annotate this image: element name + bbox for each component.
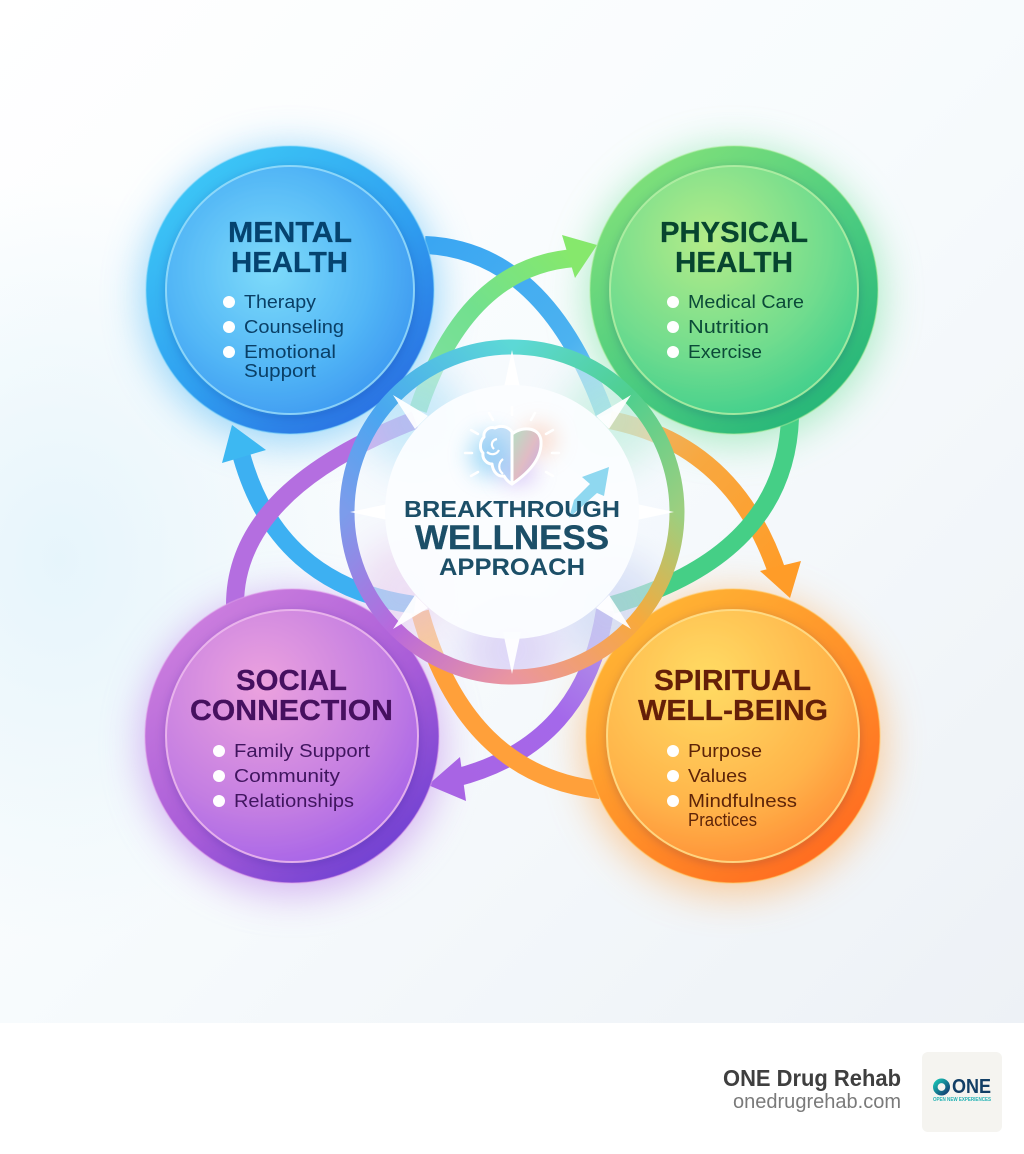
list: spiritual well-being items: Purpose (688, 741, 762, 761)
starburst (350, 350, 674, 674)
list: spiritual well-being items: Mindfulness (688, 791, 797, 811)
heading: spiritual well-being: SPIRITUAL (654, 665, 811, 697)
inner white disc (385, 385, 639, 639)
panel: social connection (145, 589, 439, 883)
heading: physical health: PHYSICAL (660, 217, 808, 249)
heading: physical health: HEALTH (675, 247, 793, 279)
heading: social connection (190, 665, 393, 727)
heading: spiritual well-being: WELL-BEING (638, 695, 828, 727)
list: mental health items: Counseling (244, 317, 344, 337)
list: social connection items: Community (234, 766, 340, 786)
panel: mental health (146, 146, 434, 434)
list: physical health items (667, 292, 804, 362)
heading: breakthrough wellness approach: BREAKTHROUGH (404, 496, 620, 522)
list: social connection items: Family Support (234, 741, 370, 761)
list: physical health items: Nutrition (688, 317, 769, 337)
panel: spiritual well-being (586, 589, 880, 883)
logo: ONE badge: ONE (952, 1076, 991, 1098)
arrow: green arc to physical health (418, 235, 597, 410)
footer brand text (723, 1065, 901, 1113)
heading: physical health (660, 217, 808, 279)
panel: physical health (590, 146, 878, 434)
heading: breakthrough wellness approach (404, 496, 620, 581)
arc: social to centre (purple) (235, 420, 415, 605)
arrow: rising cyan arrow (569, 467, 609, 518)
list: physical health items: Medical Care (688, 292, 804, 312)
list: spiritual well-being items (667, 741, 797, 830)
list: mental health items: Support (244, 361, 316, 381)
footer brand text: onedrugrehab.com (733, 1090, 901, 1113)
logo: ONE badge (922, 1052, 1002, 1132)
frosted disc (349, 349, 675, 675)
arrow: purple arc to social connection (428, 610, 605, 801)
list: spiritual well-being items: Practices (688, 810, 757, 830)
heading: mental health: MENTAL (228, 217, 352, 249)
list: mental health items: Emotional (244, 342, 336, 362)
arc: mental to centre (blue) (425, 245, 605, 415)
arrow: orange arc to spiritual well-being (610, 420, 801, 598)
heading: mental health (228, 217, 352, 279)
list: mental health items: Therapy (244, 292, 316, 312)
connecting arcs and arrows (222, 235, 801, 801)
heading: spiritual well-being (638, 665, 828, 727)
list: spiritual well-being items: Values (688, 766, 747, 786)
list: social connection items: Relationships (234, 791, 354, 811)
list: social connection items (213, 741, 370, 811)
gradient ring (347, 347, 677, 677)
heading: breakthrough wellness approach: WELLNESS (415, 519, 609, 557)
hub colour tints (361, 368, 659, 670)
heading: social connection: CONNECTION (190, 695, 393, 727)
panel: central hub (347, 347, 677, 700)
arc: physical to centre (green) (612, 418, 790, 605)
heading: mental health: HEALTH (231, 247, 348, 279)
arrow: blue arc to mental health (222, 425, 415, 605)
icon: brain and heart with rays (465, 407, 559, 484)
heading: breakthrough wellness approach: APPROACH (439, 554, 585, 581)
list: physical health items: Exercise (688, 342, 762, 362)
colour glows behind circles (141, 148, 884, 895)
heading: social connection: SOCIAL (236, 665, 347, 697)
footer band (0, 1023, 1024, 1154)
arc: spiritual to centre (orange) (420, 612, 600, 790)
footer brand text: ONE Drug Rehab (723, 1065, 901, 1091)
logo: ONE badge: OPEN NEW EXPERIENCES (933, 1097, 992, 1103)
list: mental health items (223, 292, 344, 381)
